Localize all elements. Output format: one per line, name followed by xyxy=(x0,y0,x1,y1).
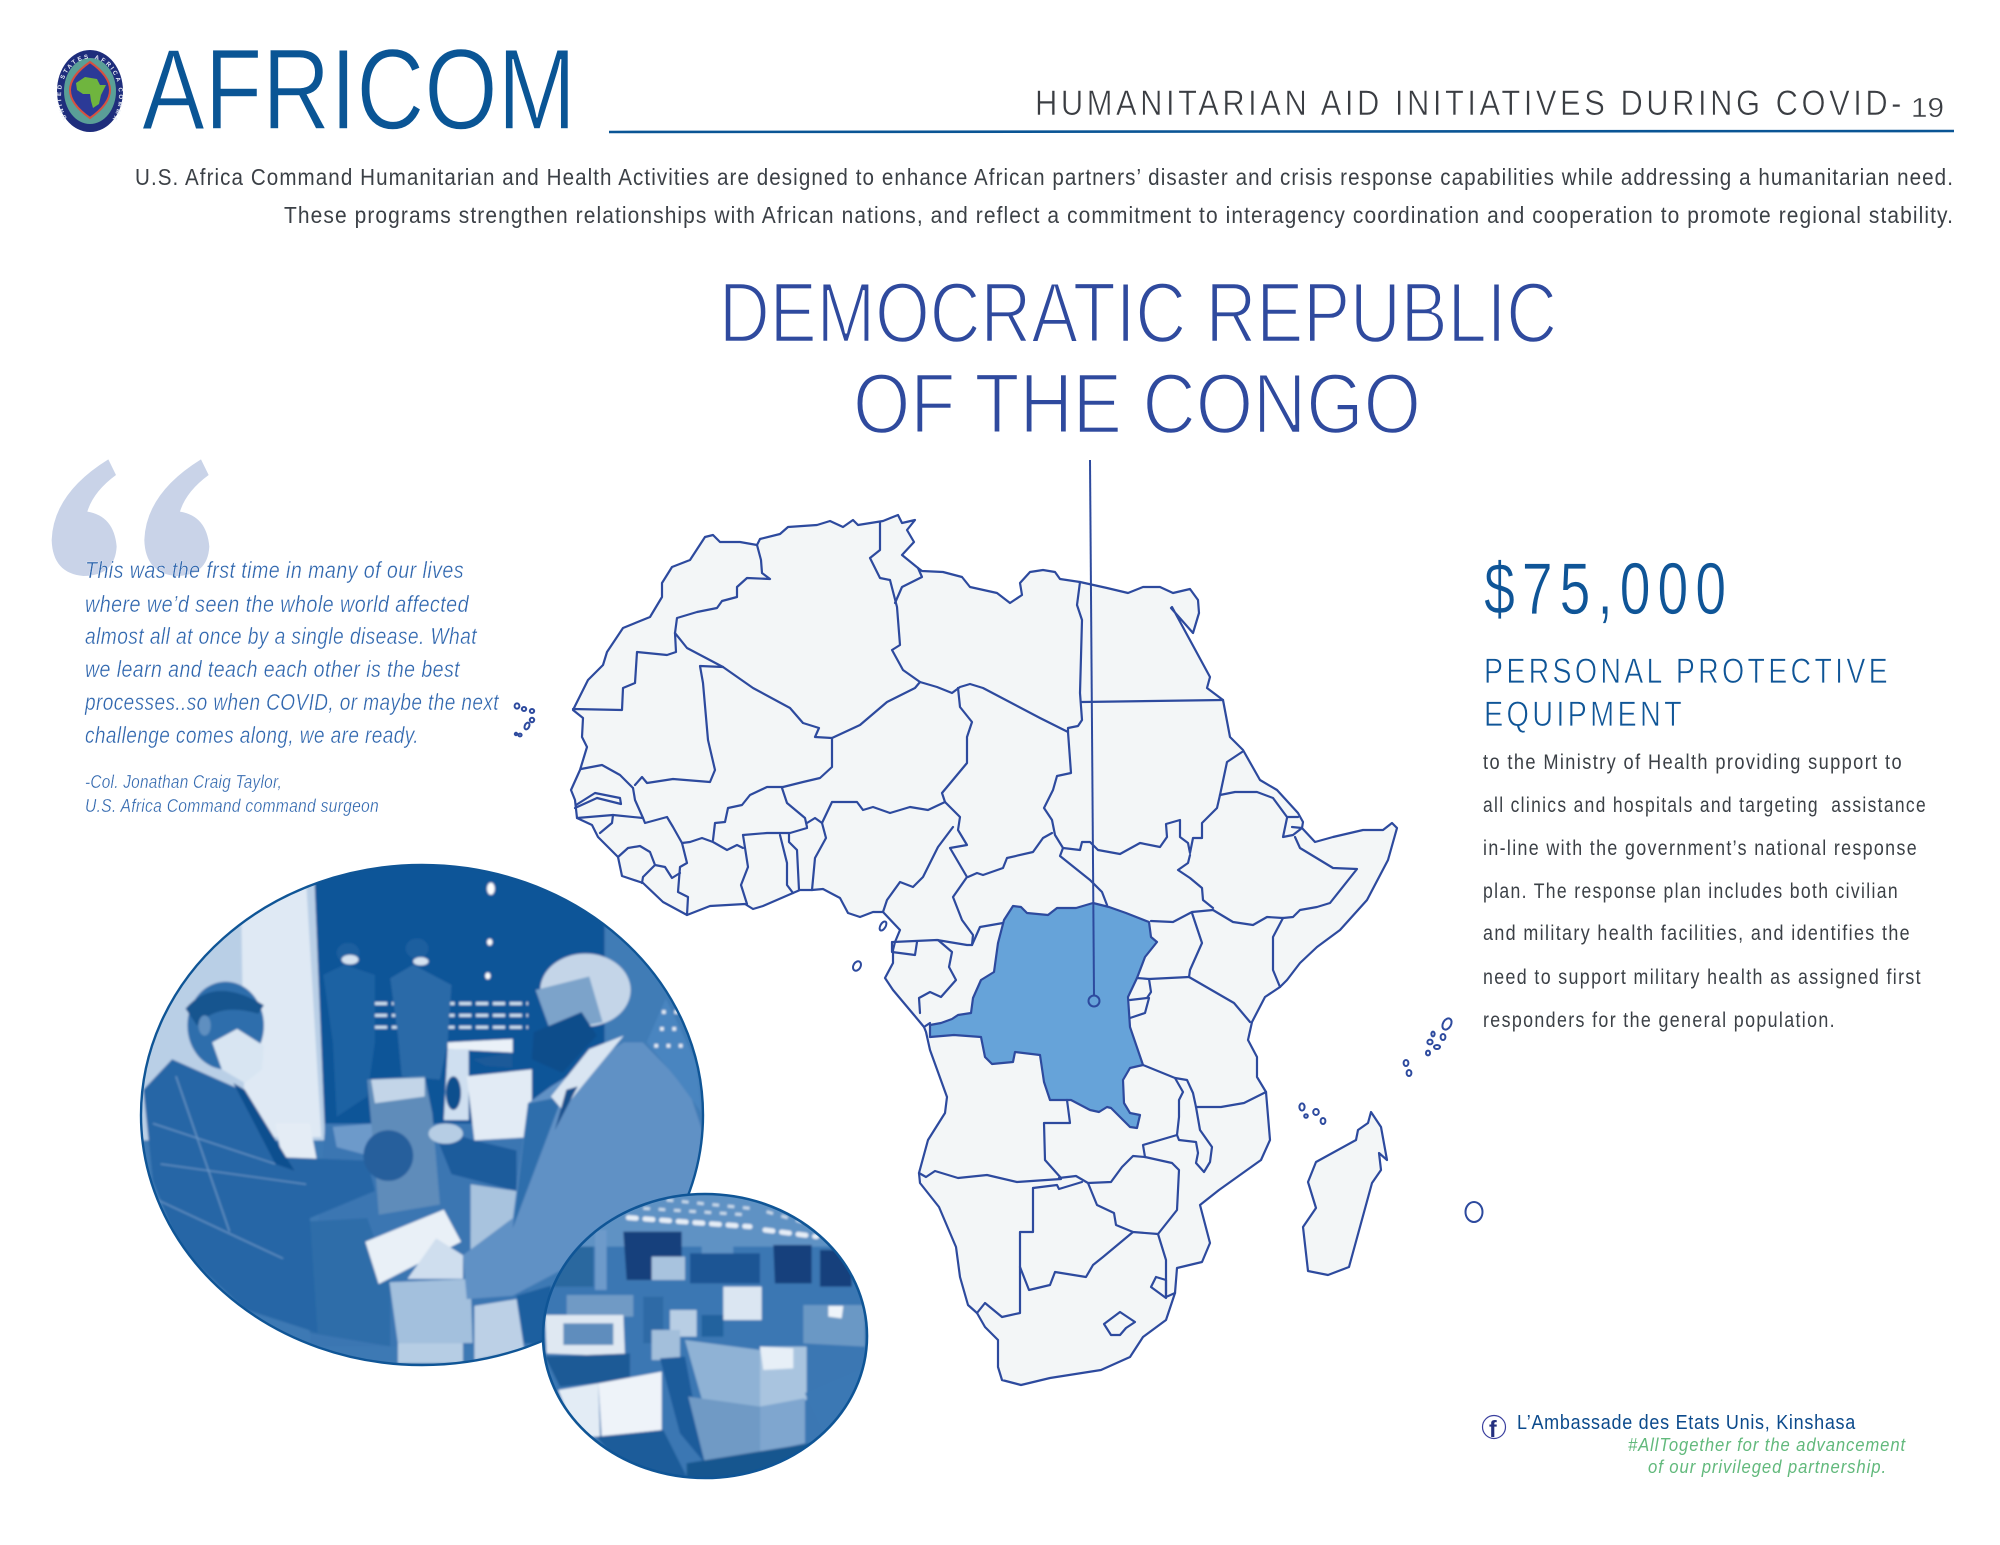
quote text: we learn and teach each other is the best xyxy=(85,656,461,682)
description text: responders for the general population. xyxy=(1483,1009,1836,1032)
hashtag note: of our privileged partnership. xyxy=(1648,1456,1887,1477)
quote attribution xyxy=(85,771,379,816)
quote text: challenge comes along, we are ready. xyxy=(85,722,419,748)
title: AFRICOM: AFRICOM xyxy=(142,26,576,154)
quote text: almost all at once by a single disease. What xyxy=(85,623,478,649)
map of Africa xyxy=(515,460,1482,1385)
land silhouette xyxy=(571,515,1397,1385)
description text: and military health facilities, and identifies the xyxy=(1483,922,1911,945)
description text: need to support military health as assigned first xyxy=(1483,966,1922,989)
photo: handover of protective equipment xyxy=(140,864,704,1366)
photo: stacked aid supplies in warehouse xyxy=(540,1190,873,1483)
icon: Facebook xyxy=(1482,1416,1506,1442)
heading: country name: DEMOCRATIC REPUBLIC xyxy=(719,266,1557,361)
quote attribution: U.S. Africa Command command surgeon xyxy=(85,795,379,816)
subheading: EQUIPMENT xyxy=(1484,695,1685,734)
quote text: where we’d seen the whole world affected xyxy=(85,591,469,617)
pointer line to DRC xyxy=(1088,460,1100,1006)
description text: to the Ministry of Health providing support to xyxy=(1483,751,1903,774)
quote text: This was the frst time in many of our lives xyxy=(85,557,464,583)
heading: country name: OF THE CONGO xyxy=(853,357,1421,452)
header xyxy=(57,26,1954,228)
icon: quotation marks xyxy=(52,459,209,576)
subtitle: 19 xyxy=(1911,92,1944,123)
country borders xyxy=(573,522,1357,1335)
subheading xyxy=(1484,652,1891,734)
icon: AFRICOM seal xyxy=(57,50,123,132)
quote text xyxy=(84,557,500,816)
panel: funding details xyxy=(1483,549,1927,1032)
description text xyxy=(1483,751,1927,1032)
hashtag note: #AllTogether for the advancement xyxy=(1628,1434,1906,1455)
source name: L’Ambassade des Etats Unis, Kinshasa xyxy=(1517,1412,1856,1434)
country: Democratic Republic of the Congo xyxy=(930,903,1157,1128)
description text: plan. The response plan includes both civilian xyxy=(1483,880,1899,903)
quote text: processes..so when COVID, or maybe the next xyxy=(84,689,500,715)
quote attribution: -Col. Jonathan Craig Taylor, xyxy=(85,771,282,792)
small islands xyxy=(515,703,1482,1222)
icon: Facebook: f xyxy=(1489,1416,1497,1442)
subtitle: HUMANITARIAN AID INITIATIVES DURING COVID- xyxy=(1035,84,1905,123)
hashtag note xyxy=(1628,1434,1906,1477)
island: Madagascar xyxy=(1303,1112,1387,1275)
source credit xyxy=(1482,1412,1906,1477)
heading: country name xyxy=(719,266,1557,452)
intro text xyxy=(135,164,1954,228)
amount: $75,000 xyxy=(1484,549,1733,630)
subheading: PERSONAL PROTECTIVE xyxy=(1484,652,1891,691)
description text: in-line with the government’s national response xyxy=(1483,837,1918,860)
